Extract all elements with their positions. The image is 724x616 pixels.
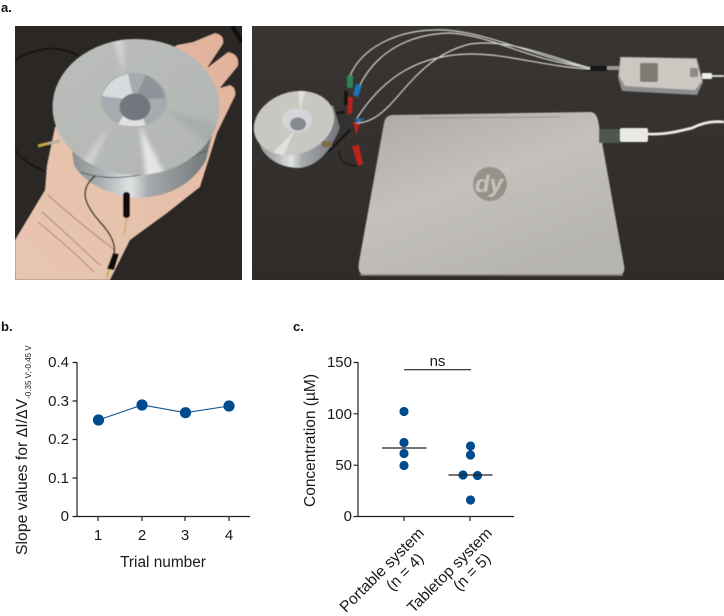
y tick labels [48,354,69,525]
x category label: portable: (n = 4) [383,550,427,594]
y tick labels: 100 [327,406,352,423]
significance bar [404,353,471,370]
y tick labels [327,354,352,525]
x tick labels: 3 [181,527,189,544]
photo: hand holding portable device [15,26,242,280]
x category label: tabletop: (n = 5) [450,550,494,594]
x tick labels: 1 [94,527,102,544]
photo: portable system with laptop: dy [475,171,505,198]
y axis title: Slope values for ΔI/ΔV [14,399,31,555]
portable system points [382,407,426,470]
x tick labels [94,527,233,544]
y axis title: -0.35 V;-0.45 V [24,345,33,399]
panel label c: c. [293,319,304,334]
data series [93,399,235,426]
hand [15,33,238,280]
y tick labels: 50 [335,457,352,474]
clips [347,75,353,88]
y tick labels: 0 [61,508,69,525]
panel label a: a. [1,0,12,15]
laptop [359,112,624,275]
line chart: slope values by trial [14,345,250,571]
connector [585,66,607,71]
hp logo [473,167,507,201]
photo: portable system with laptop [245,26,724,280]
white wires [350,30,590,123]
axes [72,362,250,521]
y tick labels: 0.1 [48,470,69,487]
x tick labels: 4 [225,527,233,544]
x tick labels: 2 [138,527,146,544]
y tick labels: 0.2 [48,431,69,448]
panel label b: b. [1,319,13,334]
y tick labels: 0 [344,508,352,525]
x axis title: Trial number [120,554,206,571]
gold pin left [48,141,60,144]
x category label: tabletop: Tabletop system [404,525,496,616]
device body [72,135,212,198]
potentiostat [618,57,703,95]
y tick labels: 150 [327,354,352,371]
axes [354,362,514,521]
y axis title: Concentration (µM) [302,374,319,507]
cone [101,73,167,127]
leads [85,176,114,255]
significance bar: ns [430,353,445,370]
tabletop system points [448,441,492,505]
x category label: portable: Portable system [337,525,428,616]
device [256,105,340,168]
usb adapter and cable [599,129,620,143]
disc top [52,39,220,175]
dot plot: concentration by system [302,353,514,616]
y tick labels: 0.4 [48,354,69,371]
y tick labels: 0.3 [48,393,69,410]
